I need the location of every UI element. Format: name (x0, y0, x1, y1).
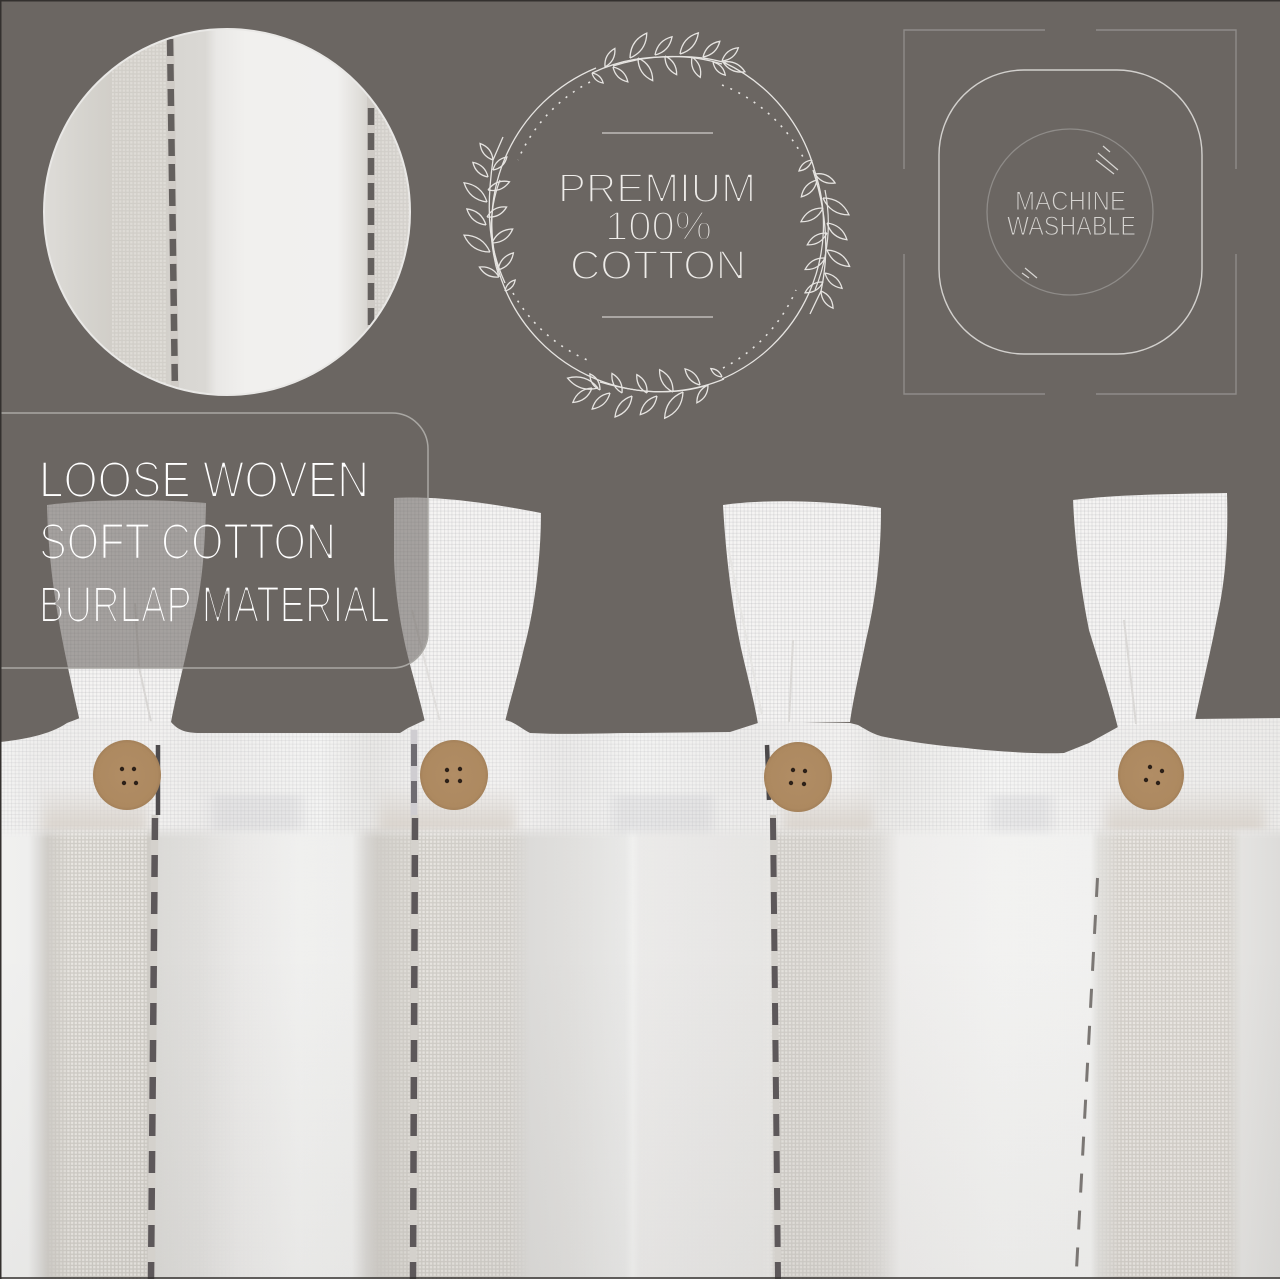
button 1 (93, 740, 161, 810)
stitch line 4 (1076, 878, 1098, 1279)
washable text: WASHABLE (1007, 211, 1136, 241)
top leaf branch (590, 30, 746, 85)
header band (2, 718, 1280, 837)
left leaf branch (461, 137, 517, 293)
inner circle (987, 129, 1153, 295)
curtain tab 1 (47, 500, 206, 722)
panel text: LOOSE WOVEN (39, 451, 369, 508)
glint lines (1022, 146, 1118, 278)
stitch line 1 (151, 745, 158, 1279)
washable text (1007, 186, 1136, 241)
bottom leaf branch (566, 367, 723, 421)
button 3 (764, 742, 832, 812)
feature panel (0, 413, 428, 668)
header weave patches (216, 796, 1049, 829)
badge text: COTTON (570, 242, 746, 288)
badge text: 100% (605, 203, 712, 249)
badge text: PREMIUM (558, 165, 756, 211)
button 4 (1118, 740, 1184, 810)
machine washable badge (904, 30, 1236, 394)
header tan shading (39, 795, 1268, 830)
curtain body (0, 710, 1280, 1279)
lower folds (0, 800, 1280, 1279)
panel text (39, 451, 390, 633)
right leaf branch (797, 158, 852, 314)
curtain tab 4 (1073, 493, 1227, 728)
panel text: SOFT COTTON (39, 513, 336, 570)
stitch line 2 (413, 730, 415, 1279)
stitch line 3 (767, 745, 778, 1279)
washable text: MACHINE (1015, 186, 1126, 216)
curtain tab 2 (394, 497, 541, 722)
badge rule bottom (602, 316, 713, 318)
rounded square (939, 70, 1202, 354)
panel text: BURLAP MATERIAL (39, 576, 390, 633)
curtain tab 3 (723, 501, 881, 724)
premium cotton wreath badge (461, 30, 852, 421)
badge rule top (602, 132, 713, 134)
corner brackets (904, 30, 1236, 394)
wreath circle (491, 56, 828, 392)
fabric close-up circle (44, 29, 411, 395)
panel box (0, 413, 428, 668)
button 2 (420, 740, 488, 810)
badge text (558, 165, 756, 288)
